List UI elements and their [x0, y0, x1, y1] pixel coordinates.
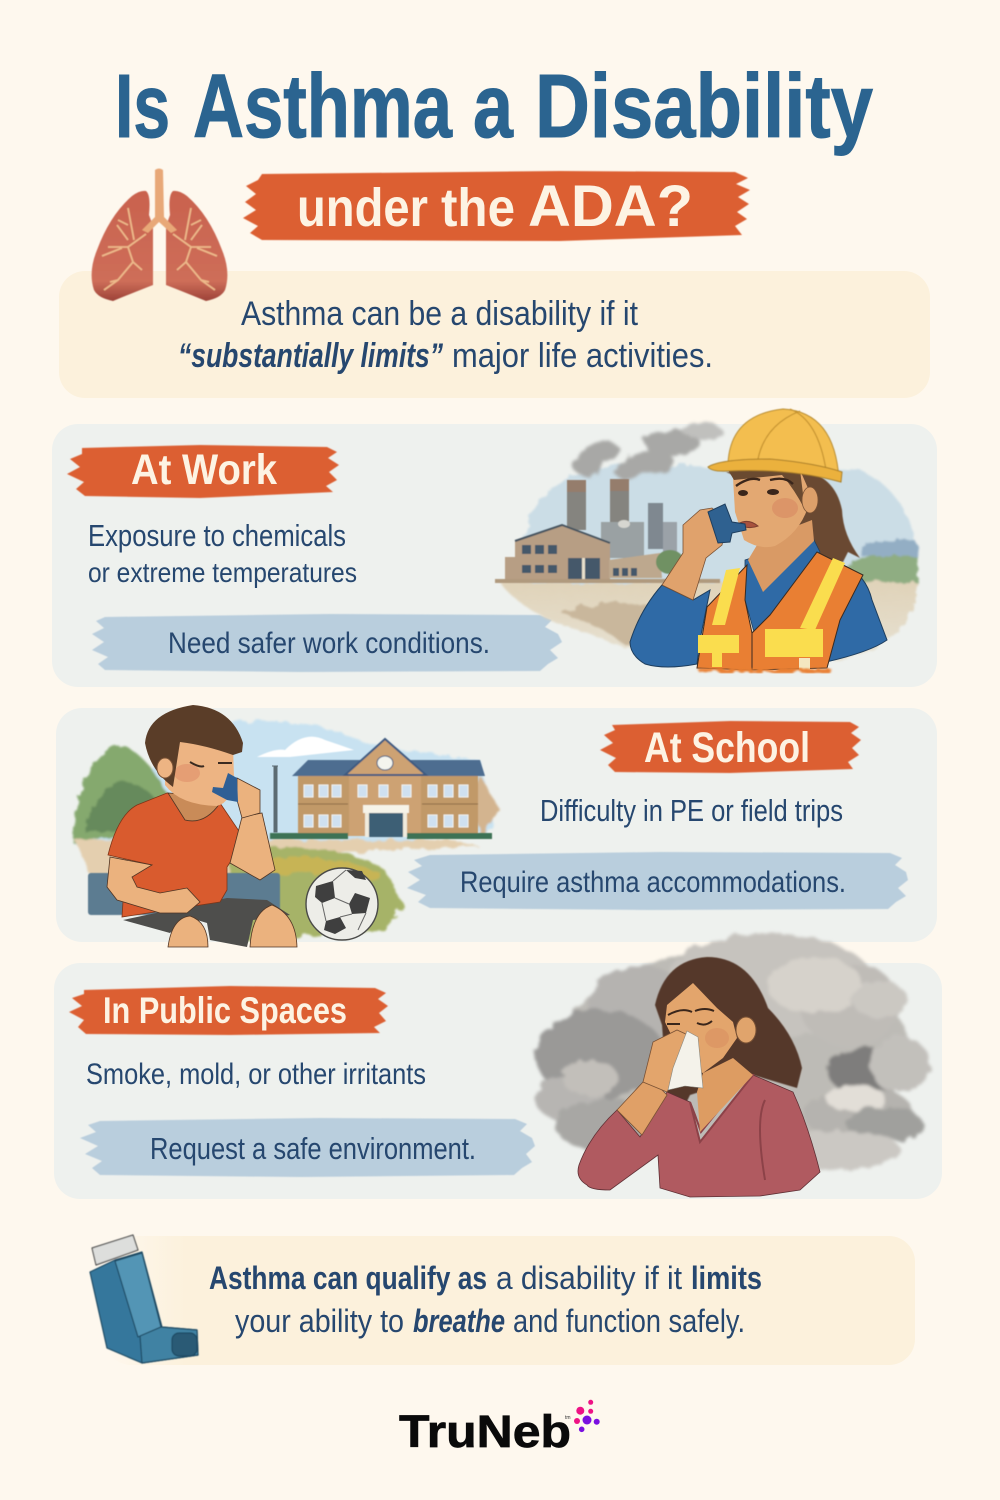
boy ear: [157, 758, 173, 778]
hand and inhaler: [662, 504, 746, 600]
subtitle banner: the: [441, 178, 515, 238]
icon: lungs: [92, 168, 227, 301]
tissue: [668, 1031, 703, 1090]
logo: TruNeb: TruNeb: [399, 1406, 571, 1457]
boy inhaler: [212, 773, 238, 802]
sky and scenery: [74, 721, 500, 940]
title: Asthma: [193, 57, 453, 157]
hand: [643, 1030, 688, 1092]
smoke cloud: [535, 933, 930, 1170]
smoke: [571, 423, 722, 479]
panel: conclusion: a disability if it: [496, 1260, 682, 1296]
sweater: [578, 1075, 820, 1197]
cloud: [257, 737, 354, 757]
boy left arm: [107, 857, 200, 913]
logo: TruNeb: [399, 1400, 600, 1457]
vest: [697, 552, 863, 670]
title: [115, 57, 873, 157]
title: a: [473, 57, 514, 157]
hard hat: [708, 409, 842, 482]
face: [665, 983, 737, 1073]
woman hair: [655, 957, 802, 1122]
boy arm and hand: [230, 813, 275, 880]
at work need: Need safer work conditions.: [168, 627, 490, 660]
illustration: boy with inhaler and school: [74, 705, 500, 947]
public spaces description: Smoke, mold, or other irritants: [86, 1058, 426, 1091]
title: Is: [115, 57, 170, 157]
public spaces request: [80, 1118, 535, 1177]
at work description: Exposure to chemicals: [88, 518, 346, 553]
public spaces request: Request a safe environment.: [150, 1131, 476, 1166]
at work heading: [67, 445, 339, 498]
boy shirt: [108, 793, 245, 917]
icon: inhaler: [90, 1235, 198, 1363]
subtitle banner: under: [297, 178, 428, 238]
bench: [88, 873, 280, 915]
at school requirement: Require asthma accommodations.: [460, 866, 846, 899]
shirt: [745, 538, 820, 632]
subtitle banner: ADA?: [528, 174, 693, 239]
panel: conclusion: your ability to: [235, 1303, 404, 1339]
panel: conclusion: [105, 1236, 915, 1365]
left arm sleeve: [630, 585, 710, 667]
neck: [697, 1058, 753, 1132]
soccer ball: [306, 868, 378, 940]
panel: definition: [59, 271, 930, 398]
panel: definition: “substantially limits”: [178, 337, 443, 375]
boy hand: [237, 778, 260, 818]
at work heading: At Work: [131, 446, 277, 494]
sky and ground blob: [500, 465, 917, 660]
panel: at work: [52, 424, 937, 687]
right sleeve: [826, 566, 887, 662]
at work need: [92, 614, 562, 672]
hem: [697, 668, 830, 673]
panel: definition: major life activities.: [452, 337, 713, 375]
at work description: or extreme temperatures: [88, 557, 357, 588]
title: Disability: [535, 57, 873, 157]
at school description: Difficulty in PE or field trips: [540, 793, 843, 828]
public spaces heading: In Public Spaces: [103, 990, 347, 1031]
boy face: [165, 733, 234, 806]
at work description: [88, 518, 357, 588]
boy neck: [168, 793, 220, 821]
worker hair: [726, 470, 860, 562]
school building: [270, 739, 492, 839]
illustration: woman with smoke cloud: [535, 933, 930, 1197]
panel: conclusion: Asthma can qualify as: [209, 1260, 487, 1296]
logo: TruNeb: tm: [565, 1415, 571, 1421]
boy shorts: [123, 898, 290, 947]
panel: conclusion: breathe: [413, 1303, 505, 1339]
boy hair: [145, 705, 243, 787]
panel: conclusion: limits: [691, 1260, 762, 1296]
panel: conclusion: and function safely.: [513, 1303, 745, 1339]
sweater shade: [690, 1074, 765, 1180]
panel: public spaces: [54, 963, 942, 1199]
factory: [495, 479, 720, 583]
at school heading: At School: [644, 724, 810, 772]
boy knees: [168, 905, 297, 947]
lamp post: [272, 766, 278, 832]
panel: definition: Asthma can be a disability if it: [241, 295, 638, 333]
at school requirement: [407, 852, 908, 910]
neck and face: [748, 520, 814, 592]
arm: [617, 1082, 667, 1135]
subtitle banner: [243, 171, 750, 241]
panel: at school: [56, 708, 937, 942]
illustration: worker with factory: [495, 409, 917, 673]
